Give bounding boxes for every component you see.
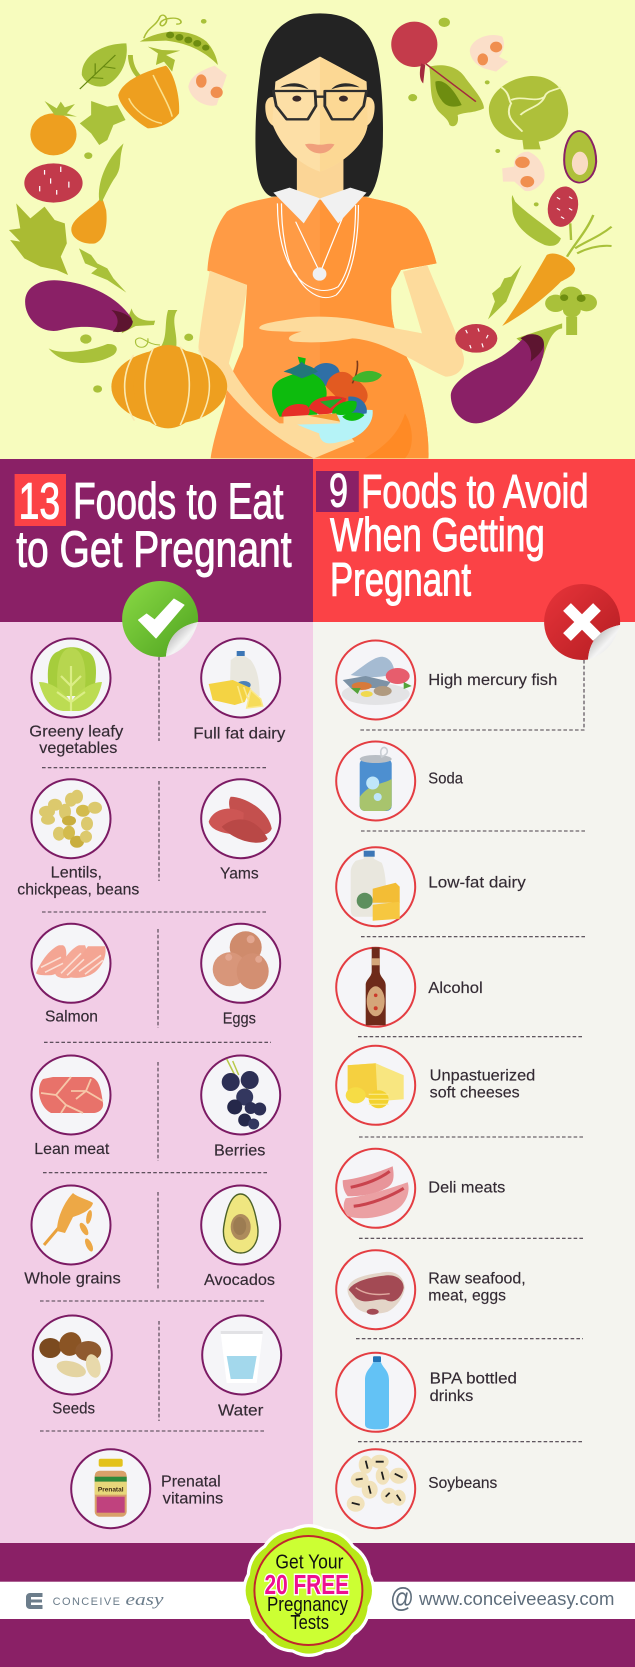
panel: eat header — [0, 459, 313, 622]
icon: cucumber — [512, 195, 561, 246]
dot — [184, 334, 193, 341]
dot — [408, 94, 417, 101]
illustration: hero — [9, 13, 612, 458]
item: soybeans: Soybeans — [428, 1475, 497, 1492]
item: raw seafood, meat, eggs: Raw seafood, — [428, 1270, 526, 1287]
icon: eggplant — [25, 280, 155, 333]
icon: small potato — [455, 324, 497, 353]
item: full fat dairy: Full fat dairy — [193, 725, 285, 742]
item: low-fat dairy: Low-fat dairy — [428, 875, 526, 892]
panel: foods to eat — [0, 622, 313, 1543]
heading: foods to eat: Foods to Eat — [73, 472, 284, 529]
icon: green leaf — [80, 101, 126, 145]
item: lean meat: Lean meat — [34, 1141, 110, 1158]
face — [272, 57, 368, 172]
item: lentils, chickpeas, beans: Lentils, — [51, 864, 102, 881]
icon: carrot — [502, 215, 612, 326]
item: high mercury fish — [336, 640, 557, 720]
eyebrows — [280, 83, 360, 89]
figure: pregnant woman — [198, 13, 464, 458]
item: yams — [201, 779, 280, 883]
item: lentils, chickpeas, beans: chickpeas, beans — [17, 882, 139, 899]
eyes — [292, 96, 348, 102]
item: greeny leafy vegetables — [29, 638, 123, 757]
dot — [80, 334, 92, 344]
lips — [305, 144, 335, 153]
icon: beet with leaf — [391, 22, 484, 126]
item: whole grains — [24, 1186, 121, 1287]
item: lean meat — [32, 1056, 110, 1158]
icon: artichoke — [9, 203, 68, 275]
background: hero — [0, 0, 635, 459]
vegetables: right wreath — [391, 18, 612, 423]
dress — [207, 197, 437, 458]
heading: foods to eat: to Get Pregnant — [16, 521, 292, 578]
badge: free pregnancy tests: Get Your — [275, 1551, 344, 1573]
icon: spinach leaf — [80, 43, 127, 89]
item: greeny leafy vegetables: Greeny leafy — [29, 724, 123, 741]
item: BPA bottled drinks: BPA bottled — [430, 1371, 517, 1388]
right arm and hand — [259, 265, 464, 377]
heading: foods to avoid: 9 — [329, 464, 348, 517]
website address — [390, 1582, 614, 1613]
dot — [534, 202, 539, 206]
item: prenatal vitamins — [71, 1449, 223, 1528]
icon: avocado — [564, 131, 596, 183]
item: prenatal vitamins: Prenatal — [98, 1487, 124, 1494]
icon: onion — [71, 143, 124, 244]
item: prenatal vitamins: vitamins — [163, 1491, 223, 1508]
item: soda: Soda — [428, 770, 463, 787]
dot — [93, 385, 102, 393]
heading: foods to eat: 13 — [19, 472, 60, 529]
icon: cabbage — [489, 76, 568, 149]
item: unpasteurized soft cheeses — [336, 1046, 535, 1125]
dress shade — [320, 197, 437, 458]
icon: red cross sticker — [544, 584, 620, 660]
necklace — [277, 203, 358, 298]
face shade — [320, 57, 368, 172]
item: soybeans — [336, 1449, 497, 1528]
item: full fat dairy — [193, 638, 285, 742]
dot — [495, 149, 500, 153]
logo: Conceive Easy: CONCEIVE — [53, 1596, 120, 1608]
website address: www.conceiveeasy.com — [418, 1588, 614, 1609]
item: eggs — [201, 924, 280, 1027]
item: salmon: Salmon — [45, 1009, 98, 1026]
item: prenatal vitamins: Prenatal — [161, 1474, 221, 1491]
item: berries — [201, 1056, 280, 1160]
item: greeny leafy vegetables: vegetables — [39, 740, 117, 757]
vegetables: left wreath — [9, 15, 227, 393]
item: BPA bottled drinks: drinks — [430, 1388, 473, 1405]
item: unpasteurized soft cheeses: Unpastuerized — [430, 1067, 535, 1084]
number box — [15, 474, 66, 526]
icon: broccoli — [545, 287, 597, 335]
icon: orange pepper — [118, 55, 179, 128]
item: avocados: Avocados — [204, 1272, 275, 1289]
website address: @ — [390, 1582, 414, 1613]
panel: avoid header — [313, 459, 635, 622]
item: yams: Yams — [220, 866, 259, 883]
item: berries: Berries — [214, 1143, 265, 1160]
item: BPA bottled drinks — [336, 1353, 517, 1432]
item: deli meats — [336, 1149, 505, 1228]
dividers — [40, 657, 271, 1431]
item: high mercury fish: High mercury fish — [428, 672, 557, 689]
item: raw seafood, meat, eggs: meat, eggs — [428, 1288, 506, 1305]
icon: pumpkin — [111, 310, 227, 428]
icon: mushroom — [470, 35, 508, 72]
dividers — [356, 660, 587, 1442]
icon: green check sticker — [122, 581, 198, 657]
bowl of vegetables — [272, 357, 382, 443]
item: seeds: Seeds — [52, 1400, 95, 1417]
heading: foods to avoid — [329, 464, 588, 606]
item: raw seafood, meat, eggs — [336, 1250, 526, 1329]
heading: foods to eat — [16, 472, 292, 578]
item: water: Water — [218, 1402, 264, 1419]
item: alcohol: Alcohol — [428, 980, 483, 997]
neck — [297, 147, 343, 203]
dot — [84, 152, 92, 159]
item: deli meats: Deli meats — [428, 1179, 505, 1196]
icon: orange tomato — [30, 101, 77, 155]
left arm — [198, 271, 354, 458]
badge: free pregnancy tests: Tests — [290, 1612, 329, 1634]
badge: free pregnancy tests: 20 FREE — [264, 1569, 349, 1600]
dress belly shadow — [364, 413, 412, 458]
heading: foods to avoid: When Getting — [330, 508, 545, 561]
hair — [255, 13, 383, 197]
number box — [316, 471, 359, 512]
item: lentils, chickpeas, beans — [17, 779, 139, 899]
panel: foods to avoid — [313, 622, 635, 1543]
item: unpasteurized soft cheeses: soft cheeses — [430, 1085, 520, 1102]
icon: eggplant — [451, 323, 562, 423]
logo: Conceive Easy: easy — [126, 1590, 164, 1609]
icon: mushroom — [188, 66, 227, 106]
dot — [439, 18, 450, 27]
item: water — [202, 1316, 281, 1419]
item: soda — [336, 742, 463, 820]
badge: free pregnancy tests — [242, 1524, 375, 1657]
icon: red potato — [24, 163, 83, 203]
item: salmon — [32, 924, 110, 1026]
icon: pea pod — [140, 15, 218, 72]
dot — [485, 80, 490, 84]
collar — [273, 188, 367, 223]
item: seeds — [33, 1316, 112, 1417]
ears — [265, 97, 375, 127]
glasses — [273, 91, 367, 119]
footer band — [0, 1543, 635, 1667]
heading: foods to avoid: Pregnant — [330, 553, 471, 606]
item: avocados — [201, 1186, 280, 1289]
icon: mushroom — [502, 152, 545, 191]
badge: free pregnancy tests: Pregnancy — [267, 1594, 348, 1616]
pendant — [313, 267, 326, 281]
logo: Conceive Easy — [26, 1590, 164, 1609]
item: eggs: Eggs — [223, 1010, 256, 1027]
icon: red potato — [545, 185, 581, 229]
icon: arugula — [488, 265, 522, 319]
item: alcohol — [336, 947, 483, 1027]
dot — [201, 19, 207, 24]
item: low-fat dairy — [336, 847, 526, 926]
item: whole grains: Whole grains — [24, 1270, 121, 1287]
icon: cucumber — [49, 344, 117, 363]
icon: arugula — [79, 248, 126, 293]
